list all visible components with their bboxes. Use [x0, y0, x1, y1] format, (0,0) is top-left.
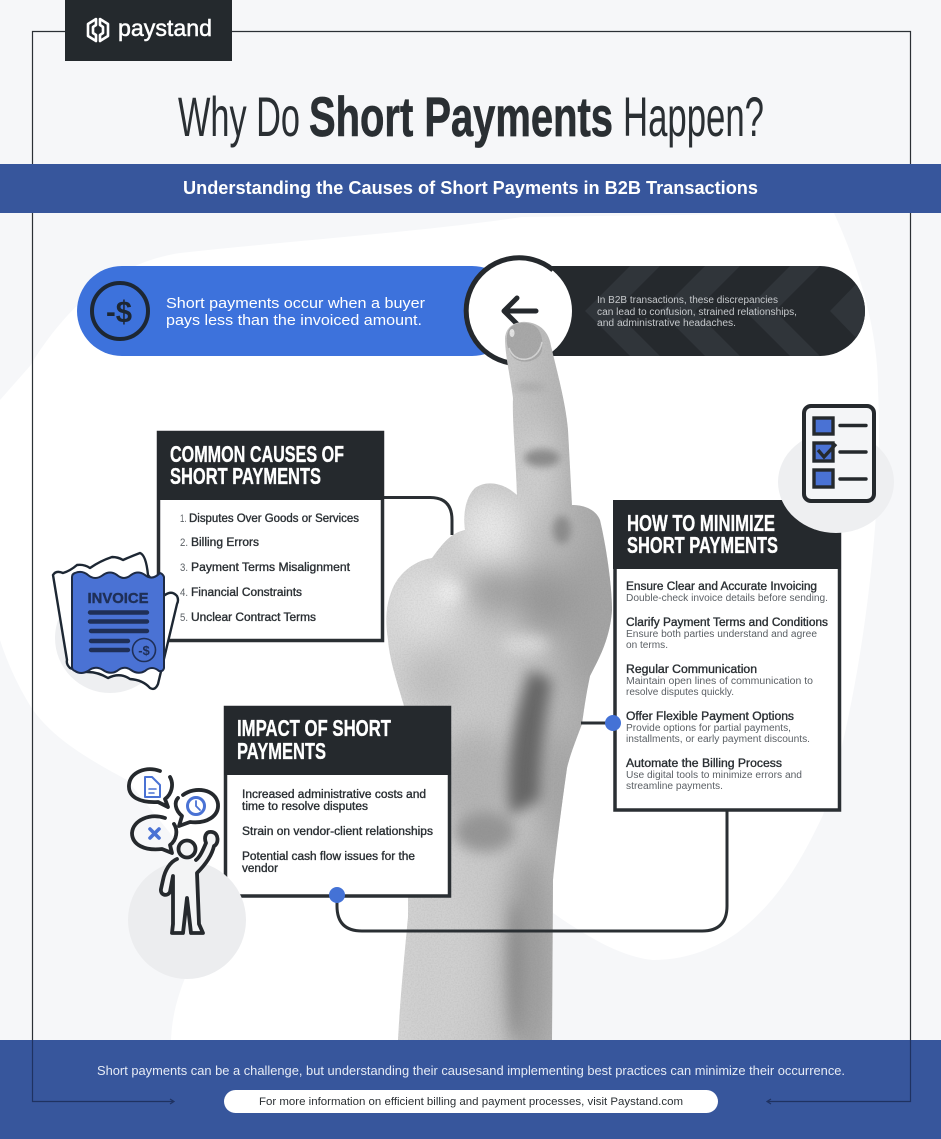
speech bubble: cross	[132, 816, 176, 853]
tip 2: on terms.	[626, 640, 668, 651]
tip 4: Offer Flexible Payment Options	[626, 711, 794, 723]
consequence text	[597, 295, 797, 329]
person figure	[161, 832, 218, 933]
icon: paystand mark	[88, 19, 108, 41]
tip 5: Automate the Billing Process	[626, 758, 782, 770]
tip 2	[626, 617, 828, 651]
heading: IMPACT OF SHORT	[237, 715, 391, 741]
impact list: Strain on vendor-client relationships	[242, 826, 433, 838]
tip 4: installments, or early payment discounts.	[626, 734, 810, 745]
tip 2: Ensure both parties understand and agree	[626, 629, 817, 640]
definition text	[166, 295, 425, 329]
speech bubble: clock	[176, 790, 218, 826]
tip 3: resolve disputes quickly.	[626, 687, 734, 698]
connector dot: impact	[329, 887, 345, 903]
list: 3.	[180, 562, 188, 574]
footer band	[0, 1040, 941, 1139]
impact list	[242, 789, 433, 875]
heading: COMMON CAUSES OF	[170, 441, 344, 467]
connector: hand to minimize	[581, 722, 613, 724]
definition text: Short payments occur when a buyer	[166, 295, 425, 312]
heading: HOW TO MINIMIZE	[627, 510, 775, 536]
list: 1.	[180, 513, 186, 525]
tip 5: Use digital tools to minimize errors and	[626, 770, 802, 781]
connector dot: minimize	[605, 715, 621, 731]
heading: PAYMENTS	[237, 738, 326, 764]
heading: SHORT PAYMENTS	[170, 463, 321, 489]
icon: minus dollar: -$	[106, 294, 132, 329]
title: Why Do	[178, 85, 300, 148]
icon: checklist	[804, 406, 874, 501]
checklist blob	[778, 431, 894, 533]
frame return arrows	[32, 1040, 910, 1104]
logo block: paystand	[118, 15, 212, 41]
panel: impact	[224, 706, 451, 896]
tip 2: Clarify Payment Terms and Conditions	[626, 617, 828, 629]
connector: causes to hand	[384, 498, 452, 535]
arrow button	[466, 258, 572, 363]
dark half	[552, 266, 865, 356]
consequence text: can lead to confusion, strained relationships,	[597, 307, 797, 318]
subtitle band	[0, 164, 941, 213]
impact list: Potential cash flow issues for the	[242, 851, 415, 863]
closing statement: Short payments can be a challenge, but understanding their causesand implementing best practices can minimize their occurrence.	[97, 1064, 845, 1078]
icon: invoice: INVOICE	[88, 591, 149, 607]
definition text: pays less than the invoiced amount.	[166, 312, 422, 329]
icon: invoice blob	[55, 583, 165, 693]
list: Unclear Contract Terms	[191, 612, 316, 624]
subtitle band: Understanding the Causes of Short Payments in B2B Transactions	[183, 178, 758, 198]
hand photo	[380, 320, 620, 1070]
impact list: vendor	[242, 863, 278, 875]
tip 1: Double-check invoice details before sending.	[626, 593, 828, 604]
heading	[237, 715, 391, 764]
list: 4.	[180, 587, 188, 599]
background blob	[0, 213, 879, 1040]
tip 4	[626, 711, 810, 745]
speech bubble: document	[129, 769, 172, 807]
list: Disputes Over Goods or Services	[189, 513, 359, 525]
blue half	[77, 266, 517, 356]
list: 2.	[180, 537, 188, 549]
icon: person with speech bubbles	[129, 769, 218, 933]
tip 1	[626, 581, 828, 604]
title: Happen?	[623, 85, 764, 148]
list: 5.	[180, 612, 188, 624]
list	[180, 513, 359, 624]
tip 5: streamline payments.	[626, 781, 723, 792]
heading	[627, 510, 778, 558]
icon: invoice	[53, 553, 178, 689]
consequence text: In B2B transactions, these discrepancies	[597, 295, 778, 306]
impact list: Increased administrative costs and	[242, 789, 426, 801]
tip 3: Maintain open lines of communication to	[626, 676, 813, 687]
heading	[170, 441, 344, 489]
tip 3	[626, 664, 813, 698]
list: Financial Constraints	[191, 587, 302, 599]
connector: impact to minimize	[337, 810, 727, 931]
tip 4: Provide options for partial payments,	[626, 723, 791, 734]
call to action pill	[224, 1090, 718, 1113]
list: Payment Terms Misalignment	[191, 562, 351, 574]
tip 5	[626, 758, 802, 792]
panel: common causes	[157, 431, 384, 640]
panel: definition pill	[77, 258, 870, 363]
icon: minus dollar	[92, 283, 148, 339]
tip 1: Ensure Clear and Accurate Invoicing	[626, 581, 817, 593]
heading: SHORT PAYMENTS	[627, 532, 778, 558]
icon: invoice: -$	[138, 643, 151, 658]
title: Short Payments	[309, 85, 613, 148]
fingernail	[507, 323, 542, 362]
tip 3: Regular Communication	[626, 664, 757, 676]
panel: how to minimize	[613, 500, 841, 810]
list: Billing Errors	[191, 537, 259, 549]
consequence text: and administrative headaches.	[597, 318, 736, 329]
impact list: time to resolve disputes	[242, 801, 368, 813]
logo block	[65, 0, 232, 61]
person blob	[128, 861, 246, 979]
call to action pill: For more information on efficient billing and payment processes, visit Paystand.com	[259, 1096, 683, 1108]
